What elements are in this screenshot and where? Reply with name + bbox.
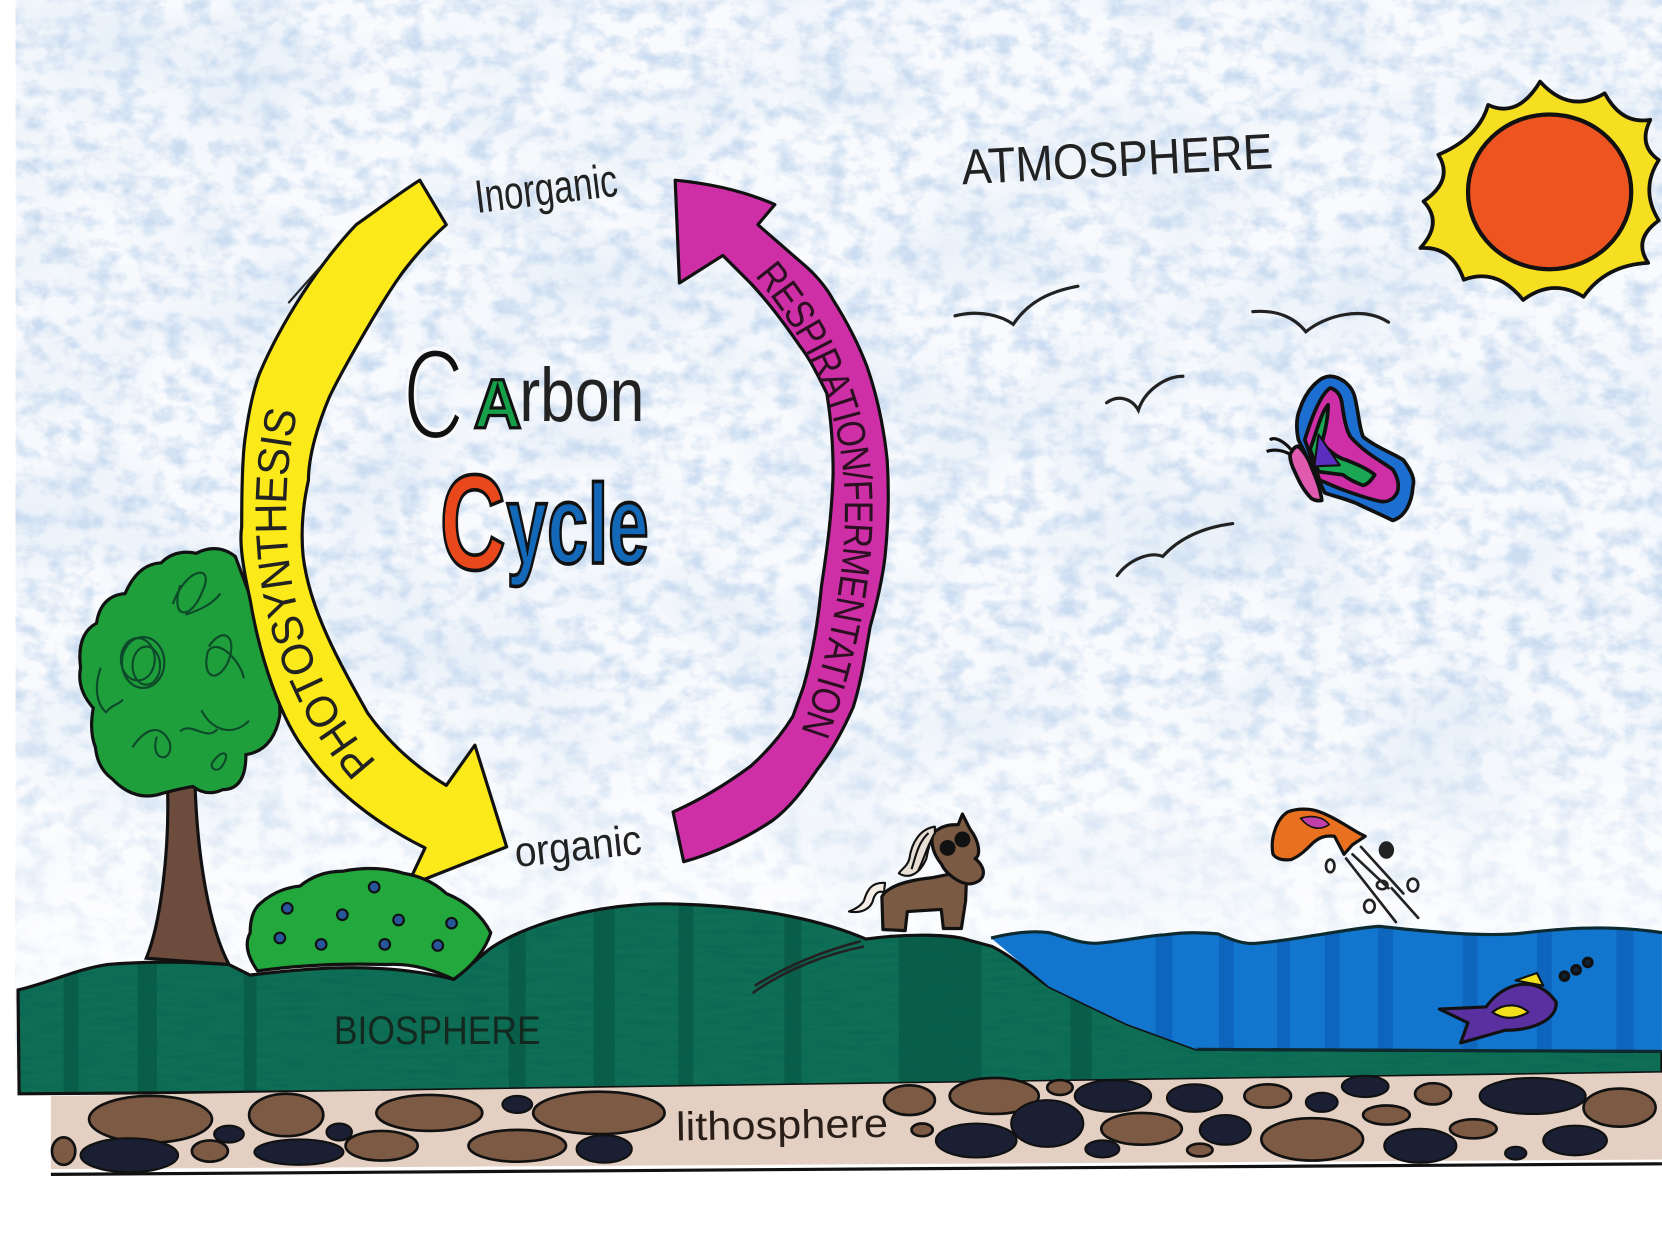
arrow: photosynthesis [239,178,508,880]
water outline [991,926,1662,1051]
title: carbon cycle: C [403,323,464,467]
label: organic: organic [512,816,644,876]
heading: atmosphere: ATMOSPHERE [960,123,1274,195]
water [991,928,1662,1051]
label: inorganic: Inorganic [472,154,620,223]
tree crown [80,549,280,796]
arrow label: respiration/fermentation: RESPIRATION/FERMENTATION [756,260,873,738]
bush berries [275,882,457,951]
butterfly [1267,376,1414,520]
title: carbon cycle: A [474,365,522,443]
birds [955,286,1389,576]
arrow label: photosynthesis: PHOTOSYNTHESIS [255,409,375,780]
water splash [1326,843,1418,922]
land: biosphere hills [20,905,1660,1092]
title: carbon cycle: rbon [519,353,644,438]
jumping fish [1272,809,1365,860]
tree trunk [146,785,229,965]
label: biosphere: BIOSPHERE [334,1008,541,1053]
title: carbon cycle: C [440,446,506,598]
brown rocks [52,1078,1656,1165]
dark rocks [81,1076,1607,1172]
lithosphere band [51,1073,1662,1174]
land outline [18,904,1662,1094]
horse [849,814,983,931]
label: lithosphere: lithosphere [676,1101,888,1149]
title: carbon cycle [403,323,649,598]
crown scribbles [97,573,249,770]
bush [247,869,491,979]
sun [1420,82,1659,300]
tree [80,549,280,965]
swimming fish [1439,958,1592,1043]
hill crease line [753,941,864,993]
arrow: respiration/fermentation [672,178,890,864]
title: carbon cycle: ycle [507,461,649,587]
stray pen line [288,267,320,303]
